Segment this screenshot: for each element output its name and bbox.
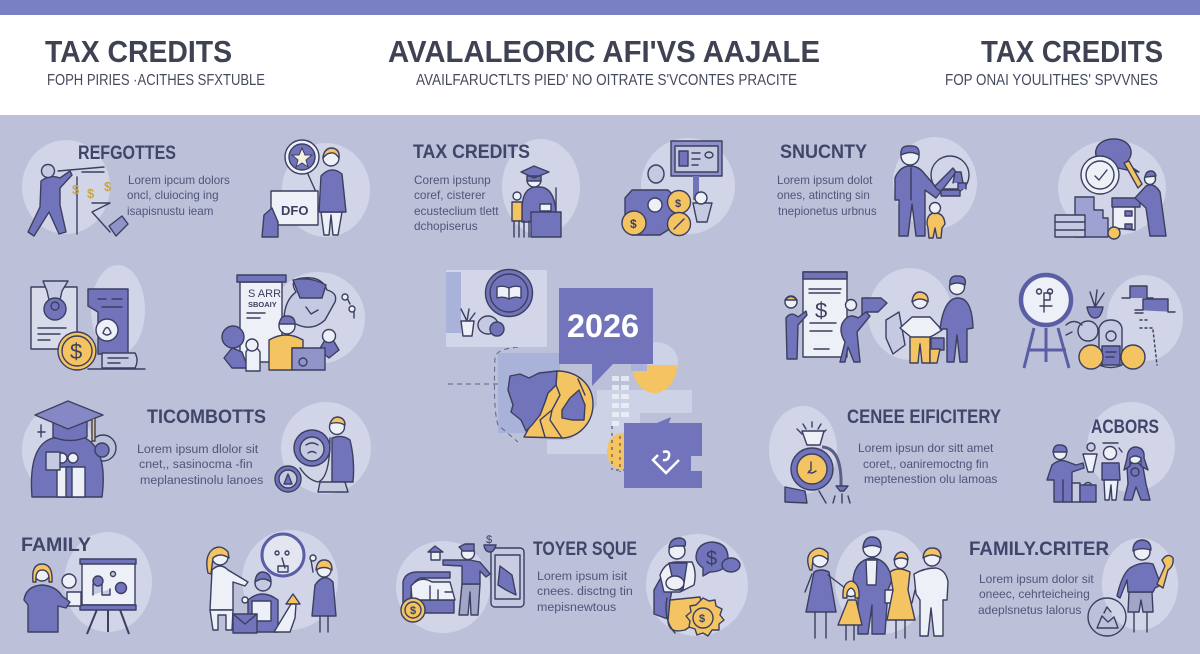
body text: cnees. disctng tin (537, 584, 633, 598)
icon: group with banner, bag and money: SBOAIY (248, 300, 277, 309)
body text: ecusteclium tlett (414, 204, 499, 218)
icon: bag, coins and monitor: $ (675, 198, 681, 210)
body text: Lorem ipsum isit (537, 569, 628, 583)
header band (0, 15, 1200, 115)
header center: AVAILFARUCTLTS PIED' NO OITRATE S'VCONTES PRACITE (416, 72, 797, 89)
heading: CENEE EIFICITERY (847, 407, 1001, 428)
pale back panels (547, 390, 692, 454)
puzzle piece with icon (624, 417, 702, 488)
icon: graduate with gift (22, 401, 116, 497)
header right: TAX CREDITS (981, 34, 1163, 69)
body text: coref, cisterer (414, 188, 486, 202)
body text: meplanestinolu lanoes (140, 473, 263, 487)
icon: teacher, student and girl (207, 530, 338, 633)
panel: refgottes (22, 140, 230, 236)
card: book and plant (446, 270, 547, 347)
icon: workers with invoice sheet: $ (815, 298, 827, 323)
heading: FAMILY (21, 535, 91, 556)
icon: man with machine and phone: $ (486, 534, 492, 546)
icon: group with briefcase (1047, 402, 1175, 502)
icon: family of five (805, 530, 948, 640)
body text: Lorem ipsum dlolor sit (137, 442, 259, 456)
body text: cnet,, sasinocma -fin (139, 457, 253, 471)
panel: ticombotts (22, 401, 371, 497)
heading: SNUCNTY (780, 142, 867, 163)
header left (45, 34, 265, 89)
body text: adeplsnetus lalorus (978, 603, 1081, 617)
header center: AVALALEORIC AFI'VS AAJALE (388, 34, 820, 69)
icon: certificate, coin and document (31, 265, 145, 370)
icon: man with speech bubbles and gear: $ (706, 548, 717, 570)
icon: person with telescope and dollars: $ (104, 179, 112, 194)
icon: certificate, coin and document: $ (70, 339, 82, 364)
body text: Lorem ipsun dor sitt amet (858, 441, 994, 455)
panel: central 2026 illustration (446, 270, 702, 488)
header center (388, 34, 820, 89)
panel: acbors (1047, 402, 1175, 502)
icon: man with speech bubbles and gear (646, 534, 748, 636)
body text: oncl, cluiocing ing (127, 189, 219, 202)
body text: Lorem ipsum dolor sit (979, 572, 1094, 586)
icon: man with machine and phone: $ (410, 605, 416, 617)
body text: isapisnustu ieam (127, 205, 213, 218)
header left: TAX CREDITS (45, 34, 232, 69)
heading: TICOMBOTTS (147, 407, 266, 428)
icon: magnifier clock with pipe (769, 406, 850, 503)
heading: TAX CREDITS (413, 142, 530, 163)
icon: group with banner, bag and money (222, 272, 365, 371)
body text: tnepionetus urbnus (778, 205, 877, 218)
body text: mepisnewtous (537, 600, 616, 614)
body text: Lorem ipcum dolors (128, 174, 230, 187)
map backdrop (498, 353, 560, 433)
body text: Corem ipstunp (414, 173, 491, 187)
globe map (508, 371, 593, 438)
icon: man with machine and phone (396, 534, 524, 633)
icon: woman with magnifier and board: DFO (281, 203, 308, 218)
icon: presenter at easel (24, 532, 152, 634)
yellow dashed disc (607, 433, 634, 470)
icon: man in suit and child (893, 137, 977, 238)
icon: man with speech bubbles and gear: $ (699, 613, 705, 625)
icon: boy with key and badge (1088, 538, 1178, 636)
top accent bar (0, 0, 1200, 15)
body text: coret,, oaniremoctng fin (863, 457, 988, 471)
heading: REFGOTTES (78, 143, 176, 164)
header left: FOPH PIRIES ·ACITHES SFXTUBLE (47, 72, 265, 89)
heading: FAMILY.CRITER (969, 539, 1109, 560)
icon: graduate at desk (502, 139, 580, 237)
panel: cenee eificitery (769, 406, 1001, 503)
header right (945, 34, 1163, 89)
icon: person with telescope and dollars (22, 140, 128, 236)
icon: easel, coins and steps (1021, 275, 1183, 369)
body text: meptenestion olu lamoas (864, 472, 997, 486)
icon: woman with magnifier and board (262, 140, 370, 237)
panel: tax credits (413, 139, 580, 237)
icon: workers with invoice sheet (785, 268, 973, 363)
body text: oneec, cehrteicheing (979, 587, 1090, 601)
icon: person with telescope and dollars: $ (72, 182, 80, 197)
header right: FOP ONAI YOULITHES' SPVVNES (945, 72, 1158, 89)
year callout (559, 288, 653, 386)
icon: bag, coins and monitor: $ (630, 217, 637, 231)
panel: family criter (969, 538, 1178, 636)
heading: TOYER SQUE (533, 539, 637, 560)
yellow half disc (632, 365, 677, 393)
panel: family (21, 532, 152, 634)
panel: toyer sque (396, 534, 748, 636)
body text: ones, atincting sin (777, 189, 870, 202)
panel: snucnty (777, 137, 977, 238)
icon: bag, coins and monitor (622, 138, 735, 236)
year callout: 2026 (567, 308, 639, 344)
body text: dchopiserus (414, 219, 478, 233)
icon: clock, speech bubble and worker (1055, 139, 1166, 239)
icon: group with banner, bag and money: S ARR (248, 288, 281, 300)
icon: doctor with rings (275, 402, 371, 494)
body text: Lorem ipsum dolot (777, 174, 873, 187)
icon: person with telescope and dollars: $ (87, 186, 95, 201)
data squares (612, 376, 629, 426)
heading: ACBORS (1091, 417, 1159, 438)
